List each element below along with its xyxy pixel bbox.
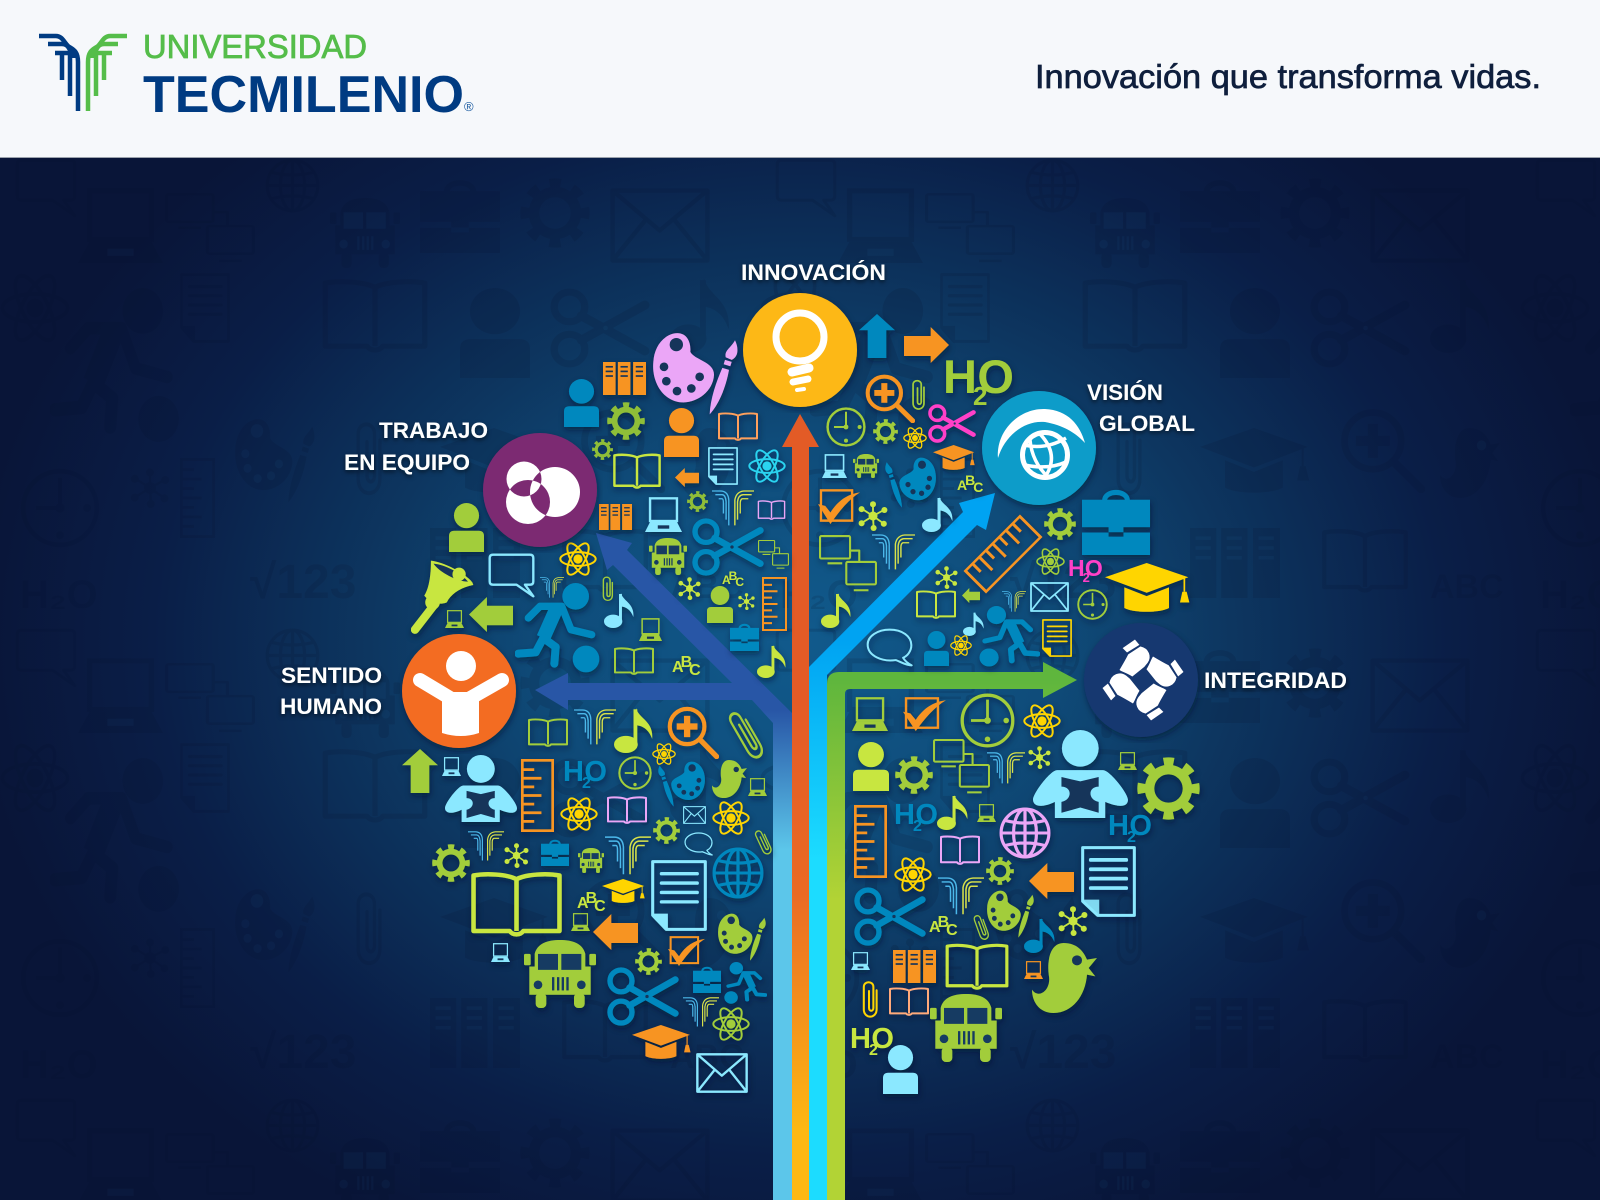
icon: note [614, 708, 652, 753]
icon: ABC: B [586, 890, 597, 907]
icon: reader [1033, 730, 1128, 818]
icon: molecule [678, 577, 701, 600]
icon: molecule [504, 843, 528, 868]
icon: H2O: 2 [913, 818, 922, 835]
icon: atom [653, 742, 675, 766]
logo wordmark top: UNIVERSIDAD [143, 28, 367, 65]
icon: bell [415, 561, 473, 630]
icon: H2O: H [563, 756, 584, 788]
icon: swoosh and globe [998, 409, 1085, 481]
labels [280, 260, 1347, 719]
icon: mini logo [605, 837, 651, 874]
icon: mini logo [712, 491, 754, 525]
icon: person [924, 631, 949, 666]
icon: bus [524, 940, 596, 1008]
icon: ruler [965, 516, 1041, 592]
icon: molecule [1059, 906, 1087, 936]
icon: clock [962, 695, 1013, 746]
icon: note [1024, 918, 1054, 953]
icon: person [707, 586, 733, 623]
icon: H2O: 2 [973, 381, 987, 411]
icon: bus [649, 538, 687, 575]
icon: globe [1001, 809, 1049, 857]
icon: person with open arms [420, 651, 502, 736]
icon: mini logo [987, 753, 1025, 783]
icon: ABC: C [735, 575, 744, 589]
icon: mini logo [574, 710, 616, 744]
icon: gear [655, 819, 678, 842]
label: Visión: VISIÓN [1087, 380, 1163, 405]
icon: gear [898, 759, 930, 791]
icon: person [564, 379, 599, 427]
icon: briefcase [1082, 492, 1150, 555]
icon: arrow [469, 597, 513, 632]
icon: ABC: A [672, 659, 684, 676]
icon: laptop [977, 805, 996, 822]
icon: H2O: H [850, 1023, 871, 1055]
icon: shelves [603, 362, 646, 395]
icon: person [664, 408, 699, 457]
icon: ruler [522, 760, 553, 831]
circle: Sentido Humano [402, 634, 516, 748]
icon: laptop [852, 698, 888, 731]
icon: book [917, 591, 955, 618]
icon: H2O: O [871, 1023, 894, 1055]
icon: laptop [491, 944, 510, 962]
icon: book [941, 837, 979, 864]
logo emblem [39, 36, 127, 111]
label: Global: GLOBAL [1099, 411, 1195, 436]
logo wordmark bottom: TECMILENIO [143, 66, 464, 124]
label: Humano: HUMANO [280, 694, 382, 719]
orange arrow up [782, 414, 819, 1200]
icon: mini logo [683, 998, 719, 1026]
icon: briefcase [730, 625, 759, 651]
icon: book [890, 988, 928, 1015]
icon: light bulb [776, 313, 824, 390]
icon: arrow up [402, 749, 438, 793]
icon: H2O: 2 [869, 1042, 878, 1059]
icon: ABC: A [722, 573, 731, 587]
icon: clock [1078, 590, 1107, 619]
icon: laptop [645, 498, 682, 532]
icon: bus [578, 848, 604, 873]
icon: clock [828, 409, 864, 445]
icon: book [947, 945, 1007, 988]
icon: arrow up [859, 314, 895, 358]
icon: note [821, 593, 850, 628]
icon: laptop [571, 914, 590, 931]
icon: runner [979, 606, 1038, 667]
icon: mini logo [540, 578, 564, 598]
icon: document [653, 862, 705, 929]
icon: ABC: C [594, 898, 606, 915]
icon: document [1043, 620, 1071, 656]
icon: bird [1032, 943, 1097, 1013]
icon: person [449, 503, 484, 552]
icon: envelope [697, 1054, 747, 1092]
icon: laptop [748, 779, 767, 796]
icon: H2O: H [894, 799, 915, 831]
icon: laptop [1118, 753, 1137, 770]
icon: gear [610, 405, 642, 437]
icon: ABC: A [929, 919, 941, 936]
icon: three overlapping circles [506, 462, 580, 524]
icon: reader [445, 755, 517, 822]
icon: H2O: H [1108, 810, 1129, 842]
icon: note [757, 645, 785, 678]
label: Integridad: INTEGRIDAD [1204, 668, 1347, 693]
logo: Universidad Tecmilenio [39, 28, 474, 124]
icon: document [709, 448, 737, 484]
icon: clip [973, 914, 990, 940]
label: Trabajo: TRABAJO [379, 418, 488, 443]
icon: mini logo [1002, 592, 1026, 612]
icon: book [615, 648, 653, 674]
icon: atom [895, 855, 931, 894]
icon: molecule [935, 566, 958, 589]
icon: clip [864, 982, 877, 1017]
icon: scissors [695, 521, 760, 573]
label: Sentido: SENTIDO [281, 663, 382, 688]
icon: bird [712, 760, 747, 798]
icon: runner [724, 962, 765, 1004]
icon: speech bubble [868, 630, 912, 665]
icon: atom [713, 799, 749, 837]
icon: ruler [763, 578, 786, 630]
icon: clock [619, 757, 651, 789]
icon: palette [658, 762, 705, 807]
icon: cap [933, 445, 975, 470]
icon: atom [560, 540, 596, 578]
icon: molecule [1028, 746, 1051, 769]
icon: H2O: 2 [582, 775, 591, 792]
icon: gear [1046, 510, 1074, 538]
icon: H2O: O [1085, 555, 1103, 581]
icon: book [758, 501, 785, 519]
icon: gear [435, 847, 467, 879]
icon: person [883, 1045, 918, 1094]
icon: monitors [759, 541, 788, 568]
icon: clip [754, 829, 773, 855]
icon: globe [714, 849, 762, 897]
icon: gear [688, 492, 707, 511]
icon: molecule [859, 501, 887, 531]
icon: palette [653, 333, 737, 414]
icon: cap [632, 1025, 691, 1059]
header band [0, 0, 1600, 158]
tree trunk and arrows [535, 414, 1077, 1200]
icon: note [963, 612, 984, 636]
icon: person [853, 742, 889, 791]
green arrow to Integridad [827, 662, 1077, 1200]
icon: palette [885, 458, 936, 508]
icon: atom [904, 426, 926, 450]
icon: laptop [1024, 962, 1043, 979]
icon: monitors [934, 740, 989, 792]
icon: ABC: B [681, 654, 692, 671]
icon: H2O: O [977, 350, 1014, 403]
icon: bus [930, 994, 1002, 1062]
icon: document [1083, 848, 1134, 915]
icon: envelope [1031, 583, 1068, 611]
icon: atom [1024, 702, 1060, 740]
icon: note [922, 497, 952, 532]
icon: monitors [820, 536, 876, 590]
icon: speech bubble [490, 555, 533, 596]
icon: laptop [445, 611, 464, 628]
icon: molecule [738, 593, 755, 610]
icon: ABC: C [946, 922, 958, 939]
icon: cap [1105, 563, 1189, 612]
icon: atom [561, 795, 597, 833]
icon: clasped hands [1102, 639, 1184, 721]
icon: shelves [893, 950, 936, 983]
icon: scissors [857, 890, 922, 943]
tagline: Innovación que transforma vidas. [1035, 58, 1541, 95]
icon: check box [818, 490, 860, 524]
icon: note [937, 795, 967, 830]
icon: gear [637, 950, 660, 973]
icon: palette [987, 891, 1034, 938]
icon: book [529, 719, 567, 746]
icon: ABC: B [729, 569, 738, 583]
icon: H2O: H [1068, 555, 1085, 581]
icon: mini logo [938, 878, 984, 914]
icon: laptop [639, 619, 662, 641]
icon: ruler [855, 806, 886, 877]
icon: ABC: C [973, 479, 983, 495]
icon: H2O: 2 [1083, 570, 1090, 585]
icon: arrow [675, 468, 699, 487]
icon: magnifier [670, 709, 717, 757]
icon: H2O: O [584, 756, 607, 788]
icon: laptop [851, 953, 870, 970]
icon: atom [951, 634, 971, 657]
icon: book [474, 874, 559, 934]
circle: Visión Global [982, 391, 1096, 505]
icon: ABC: A [577, 895, 589, 912]
icon cluster: tree foliage [402, 314, 1196, 1094]
icon: check box [668, 937, 705, 966]
icon: gear [875, 421, 896, 442]
icon: clip [913, 381, 924, 409]
icon: laptop [822, 455, 847, 478]
icon: arrow [593, 914, 638, 950]
icon: arrow [962, 588, 980, 603]
icon: arrow right [904, 327, 949, 363]
icon: magnifier [868, 377, 913, 421]
icon: ABC: C [689, 662, 701, 679]
light-blue arrow to Visión Global [809, 493, 995, 1200]
icon: shelves [599, 504, 632, 530]
icon: runner [518, 583, 599, 672]
icon: atom [713, 1005, 749, 1043]
icon: gear [1141, 761, 1196, 816]
label: Innovación: INNOVACIÓN [741, 260, 886, 285]
icon: gear [593, 440, 612, 459]
icon: bus [853, 454, 879, 478]
icon: ABC: A [957, 477, 967, 493]
icon: note [604, 593, 633, 628]
icon: laptop [442, 758, 461, 776]
icon: check box [903, 698, 946, 731]
icon: speech bubble [685, 833, 712, 855]
icon: book [608, 797, 646, 823]
icon: book [614, 455, 660, 488]
icon: ABC: B [965, 472, 975, 488]
icon: book [719, 413, 757, 440]
icon: palette [718, 914, 766, 961]
icon: arrow [1029, 863, 1074, 899]
icon: atom [1037, 547, 1064, 576]
icon: H2O: 2 [1127, 829, 1136, 846]
registered mark: ® [464, 99, 474, 114]
icon: clip [728, 710, 765, 760]
circle: Innovación [743, 293, 857, 407]
label: en Equipo: EN EQUIPO [344, 450, 470, 475]
icon: mini logo [468, 832, 504, 860]
icon: briefcase [541, 841, 569, 866]
circle: Integridad [1084, 623, 1198, 737]
icon: scissors [930, 406, 974, 441]
icon: cap [602, 879, 645, 903]
icon: atom [749, 447, 785, 485]
icon: gear [988, 859, 1012, 883]
icon: H2O: O [915, 799, 938, 831]
icon: envelope [684, 807, 705, 823]
icon: ABC: B [938, 914, 949, 931]
circle: Trabajo en Equipo [483, 433, 597, 547]
icon: mini logo [872, 535, 915, 569]
icon: clip [603, 577, 612, 600]
icon: H2O: H [943, 350, 977, 403]
icon: H2O: O [1129, 810, 1152, 842]
navy arrows and light-blue trunk [535, 533, 792, 1200]
icon: briefcase [693, 968, 721, 993]
icon: scissors [610, 970, 675, 1023]
